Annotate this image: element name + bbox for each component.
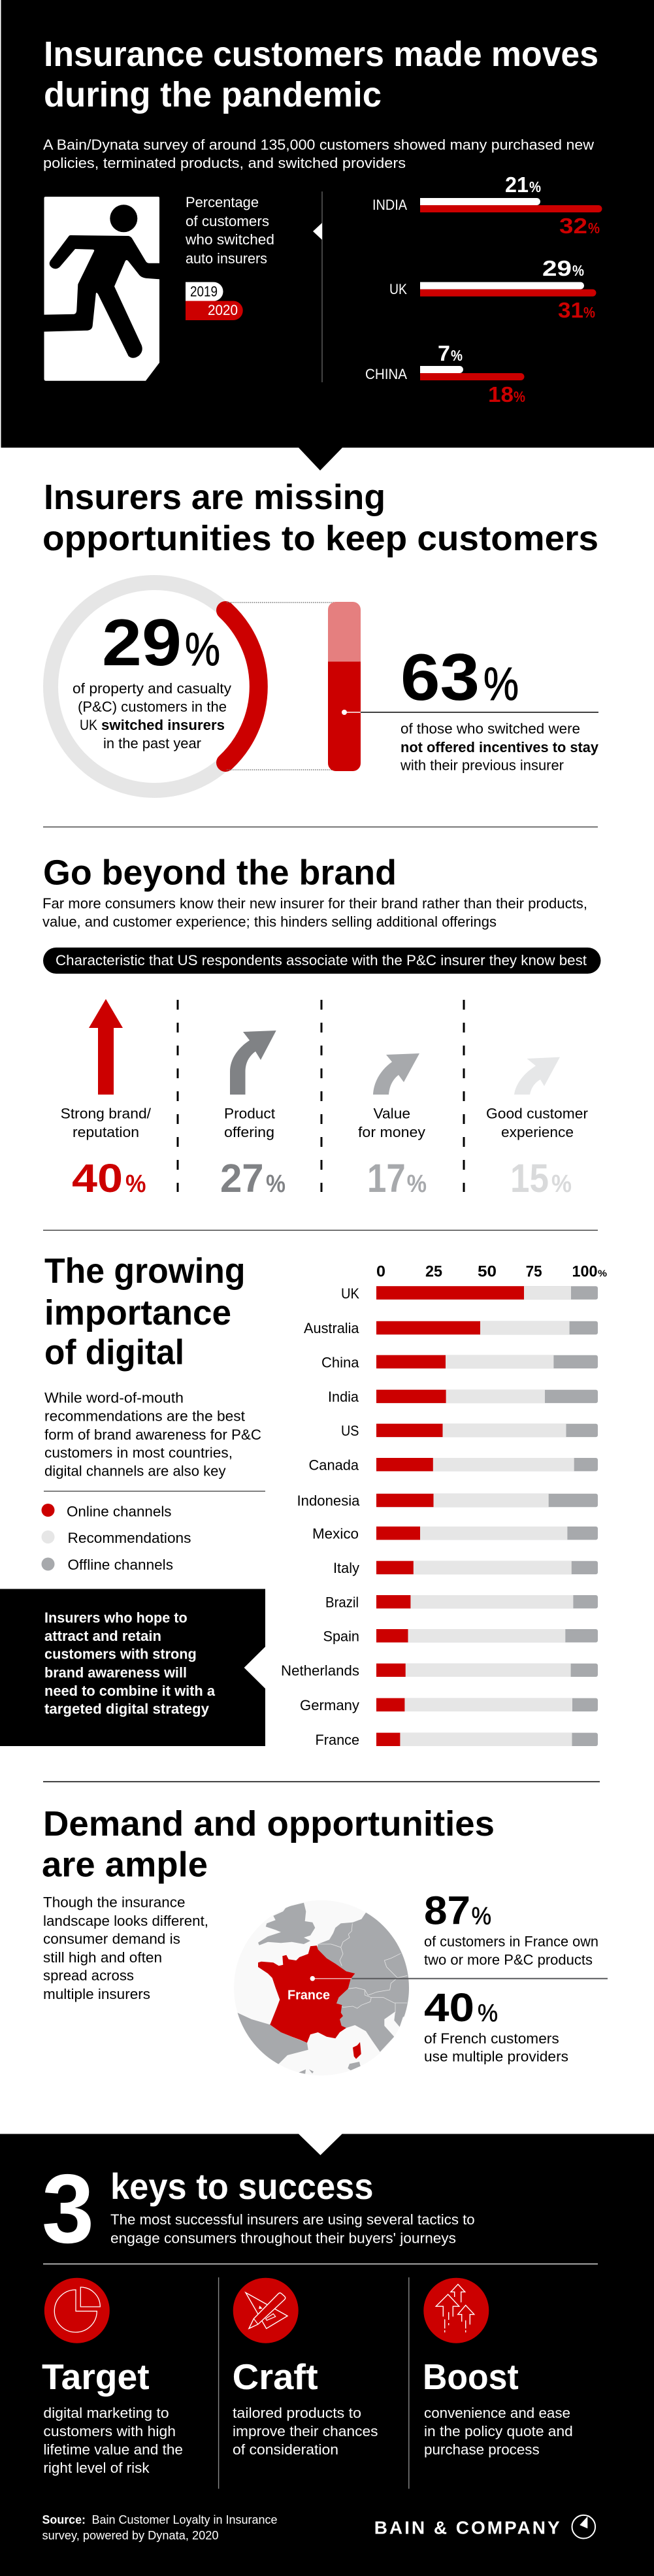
row: Australia <box>304 1320 598 1336</box>
China bars: % <box>451 347 463 364</box>
bar chart: switching by country <box>365 173 602 406</box>
body text: spread across <box>43 1968 134 1984</box>
column: product offering: % <box>266 1170 286 1198</box>
stacked bar chart: channels by country <box>281 1263 607 1748</box>
heading: are ample <box>42 1845 208 1884</box>
row: Mexico <box>312 1525 598 1542</box>
intro text: Far more consumers know their new insurer for their brand rather than their products, <box>42 895 587 912</box>
axis labels: 100 <box>572 1263 597 1281</box>
axis labels: 0 <box>376 1263 385 1281</box>
row: China: China <box>321 1354 359 1371</box>
chart description: who switched <box>185 231 274 248</box>
row: Brazil <box>325 1594 598 1610</box>
column: target: lifetime value and the <box>43 2441 183 2458</box>
panel: go beyond the brand <box>42 853 601 1200</box>
column: strong brand: reputation <box>73 1124 139 1140</box>
column: strong brand: Strong brand/ <box>61 1106 152 1122</box>
column: value for money: Value <box>374 1106 410 1122</box>
column: boost: purchase process <box>424 2441 540 2458</box>
intro text: A Bain/Dynata survey of around 135,000 customers showed many purchased new <box>43 137 594 153</box>
intro text: The most successful insurers are using several tactics to <box>110 2211 475 2228</box>
row: China <box>321 1354 598 1371</box>
title: Insurance customers made moves <box>44 35 598 74</box>
intro text <box>42 895 587 930</box>
stat: 87%: of customers in France own <box>424 1934 598 1950</box>
donut chart: 29% <box>51 583 259 791</box>
row: Indonesia: Indonesia <box>297 1493 360 1509</box>
source note: survey, powered by Dynata, 2020 <box>42 2529 218 2542</box>
chart description: auto insurers <box>186 250 267 267</box>
callout: brand awareness will <box>44 1664 187 1681</box>
stat: 87% <box>424 1889 598 1968</box>
body text: customers in most countries, <box>44 1445 233 1461</box>
stacked bar: 63% <box>328 602 598 771</box>
chart caption pill: Characteristic that US respondents associate with the P&C insurer they know best <box>56 952 587 968</box>
column: good customer experience: experience <box>501 1124 574 1140</box>
row: Spain: Spain <box>323 1628 359 1644</box>
stat: 40%: % <box>478 2000 498 2027</box>
China bars: CHINA <box>365 366 407 382</box>
stat: 40%: use multiple providers <box>424 2049 568 2065</box>
axis labels: 75 <box>526 1263 542 1281</box>
row: France: France <box>315 1732 359 1748</box>
donut chart: 29%: 29 <box>102 606 182 680</box>
icon: dark grey arrow <box>230 1031 276 1095</box>
row: Netherlands <box>281 1662 598 1679</box>
chart description: of customers <box>186 213 269 229</box>
donut chart: 29%: of property and casualty <box>73 680 231 697</box>
callout: Insurers who hope to <box>44 1610 188 1626</box>
body text: form of brand awareness for P&C <box>44 1427 261 1443</box>
stat: 87%: 87 <box>424 1889 470 1933</box>
donut chart: 29%: in the past year <box>103 735 201 751</box>
column: product offering: Product <box>224 1106 275 1122</box>
stat: 40% <box>424 1985 568 2065</box>
body text: still high and often <box>43 1949 162 1966</box>
axis labels: 25 <box>425 1263 442 1281</box>
panel: demand and opportunities <box>42 1804 608 2075</box>
UK bars: UK <box>389 281 407 297</box>
axis labels: % <box>598 1268 607 1280</box>
column: craft <box>233 2278 378 2458</box>
row: Germany <box>300 1697 598 1713</box>
column: value for money: % <box>407 1170 427 1198</box>
row: UK <box>341 1285 598 1302</box>
legend: Recommendations <box>68 1530 191 1546</box>
heading: keys to success <box>110 2166 374 2207</box>
heading <box>42 1804 495 1884</box>
India bars: 32 <box>559 214 587 238</box>
donut chart: 29%: % <box>185 624 220 676</box>
column: craft: improve their chances <box>233 2423 378 2439</box>
intro text: policies, terminated products, and switched providers <box>43 155 406 171</box>
map: France in Europe: France <box>287 1988 330 2002</box>
column: strong brand: % <box>125 1170 146 1198</box>
stat: 87%: % <box>472 1903 491 1930</box>
UK bars: % <box>572 262 584 279</box>
column: value for money: for money <box>358 1124 425 1140</box>
column: boost <box>423 2278 573 2458</box>
column: target <box>42 2278 183 2476</box>
intro text <box>110 2211 475 2247</box>
stat: 63%: with their previous insurer <box>400 757 564 774</box>
panel: header <box>1 0 654 471</box>
UK bars: 29 <box>542 256 572 280</box>
body text: recommendations are the best <box>44 1408 245 1424</box>
intro text <box>43 137 594 171</box>
title <box>44 35 598 114</box>
logo: Bain & Company: BAIN & COMPANY <box>374 2517 560 2537</box>
panel: growing importance of digital <box>0 1251 607 1748</box>
icon: ruler and pencil <box>233 2278 299 2343</box>
row: Brazil: Brazil <box>325 1594 359 1610</box>
row: UK: UK <box>341 1285 359 1302</box>
icon: rising arrows <box>423 2278 489 2343</box>
column: target: right level of risk <box>43 2460 150 2476</box>
title: during the pandemic <box>44 75 382 114</box>
column: target: digital marketing to <box>43 2405 169 2421</box>
body text: While word-of-mouth <box>44 1389 184 1406</box>
column: good customer experience <box>486 1057 588 1200</box>
column: value for money: 17 <box>367 1156 406 1200</box>
panel: 3 keys to success <box>0 2134 654 2576</box>
column: boost: in the policy quote and <box>424 2423 573 2439</box>
stat: 63%: not offered incentives to stay <box>401 739 599 755</box>
body text: Though the insurance <box>43 1894 186 1911</box>
India bars: % <box>529 178 541 195</box>
India bars: INDIA <box>372 197 407 213</box>
row: France <box>315 1732 598 1748</box>
body text <box>43 1894 208 2002</box>
stat: 87%: two or more P&C products <box>424 1951 593 1968</box>
row: Spain <box>323 1628 598 1644</box>
heading <box>42 478 598 558</box>
source note: Source: <box>42 2513 86 2526</box>
source note: Bain Customer Loyalty in Insurance <box>91 2513 277 2526</box>
legend: Offline channels <box>68 1557 173 1573</box>
column: product offering: offering <box>224 1124 274 1140</box>
icon: red arrow <box>89 999 123 1095</box>
chart caption pill <box>43 948 601 974</box>
China bars <box>365 341 525 406</box>
column: boost: convenience and ease <box>424 2405 570 2421</box>
heading: opportunities to keep customers <box>42 519 598 558</box>
big numeral 3: 3 <box>42 2154 94 2264</box>
legend <box>42 1504 191 1573</box>
row: US: US <box>341 1423 359 1439</box>
icon: pie chart <box>44 2278 110 2343</box>
stat: 63% <box>400 641 599 774</box>
intro text: engage consumers throughout their buyers' journeys <box>110 2230 456 2247</box>
callout: attract and retain <box>44 1628 161 1644</box>
icon: running person exit door <box>39 197 163 381</box>
legend: years: 2019 <box>190 284 218 300</box>
row: Italy: Italy <box>333 1560 359 1576</box>
donut chart: 29%: switched insurers <box>101 717 225 733</box>
panel: missing opportunities <box>42 478 599 791</box>
row: Indonesia <box>297 1493 598 1509</box>
column: strong brand: 40 <box>72 1156 123 1200</box>
column: boost: Boost <box>423 2356 519 2397</box>
source note <box>42 2513 277 2542</box>
row: Netherlands: Netherlands <box>281 1662 359 1679</box>
China bars: 7 <box>438 341 450 365</box>
China bars: % <box>514 388 525 405</box>
callout <box>0 1589 265 1746</box>
heading <box>44 1251 246 1372</box>
legend: years <box>186 282 243 320</box>
China bars: 18 <box>488 382 514 406</box>
stat: 63%: % <box>483 659 519 710</box>
donut chart: 29%: (P&C) customers in the <box>78 699 227 715</box>
intro text: value, and customer experience; this hinders selling additional offerings <box>42 914 497 930</box>
row: Germany: Germany <box>300 1697 359 1713</box>
stat: 63%: of those who switched were <box>401 720 580 737</box>
axis labels <box>376 1263 607 1281</box>
heading: Demand and opportunities <box>43 1804 495 1843</box>
row: Canada: Canada <box>308 1457 359 1473</box>
row: US <box>341 1423 598 1439</box>
body text: landscape looks different, <box>43 1913 208 1929</box>
row: Australia: Australia <box>304 1320 359 1336</box>
chart description <box>185 194 274 267</box>
legend: years: 2020 <box>208 302 238 318</box>
stat: 40%: 40 <box>424 1985 474 2030</box>
stat: 40%: of French customers <box>424 2030 559 2047</box>
heading: Insurers are missing <box>44 478 385 517</box>
column: strong brand <box>61 999 152 1200</box>
UK bars <box>389 256 597 322</box>
axis labels: 50 <box>478 1263 497 1281</box>
callout: targeted digital strategy <box>44 1701 210 1717</box>
heading: of digital <box>44 1333 184 1372</box>
donut chart: 29%: UK <box>80 717 97 733</box>
map: France in Europe <box>222 1900 608 2075</box>
heading: The growing <box>44 1251 246 1291</box>
column: product offering <box>220 1031 286 1200</box>
row: Italy <box>333 1560 598 1576</box>
legend: Online channels <box>67 1504 171 1520</box>
column: craft: tailored products to <box>233 2405 361 2421</box>
row: Canada <box>308 1457 598 1473</box>
row: India <box>328 1389 598 1405</box>
India bars: % <box>588 220 600 237</box>
chart description: Percentage <box>186 194 259 210</box>
India bars: 21 <box>505 173 529 197</box>
callout: need to combine it with a <box>44 1683 216 1699</box>
callout: customers with strong <box>44 1646 197 1662</box>
heading: Go beyond the brand <box>43 853 397 893</box>
body text: digital channels are also key <box>44 1462 226 1479</box>
India bars <box>372 173 602 238</box>
stat: 63%: 63 <box>401 641 480 714</box>
column: value for money <box>358 1053 427 1200</box>
heading: importance <box>44 1293 231 1332</box>
body text <box>44 1389 261 1479</box>
column: product offering: 27 <box>220 1156 264 1200</box>
column: target: Target <box>42 2356 150 2397</box>
row: Mexico: Mexico <box>312 1525 359 1542</box>
column: craft: of consideration <box>233 2441 338 2458</box>
column: craft: Craft <box>233 2356 318 2397</box>
column: good customer experience: 15 <box>510 1156 549 1200</box>
UK bars: % <box>583 304 595 321</box>
row: India: India <box>328 1389 359 1405</box>
body text: multiple insurers <box>43 1986 150 2002</box>
column: target: customers with high <box>43 2423 176 2439</box>
column: good customer experience: % <box>551 1170 572 1198</box>
UK bars: 31 <box>558 298 583 322</box>
icon: mid grey arrow <box>373 1053 419 1095</box>
icon: light grey arrow <box>514 1057 560 1095</box>
column: good customer experience: Good customer <box>486 1106 588 1122</box>
body text: consumer demand is <box>43 1931 180 1947</box>
